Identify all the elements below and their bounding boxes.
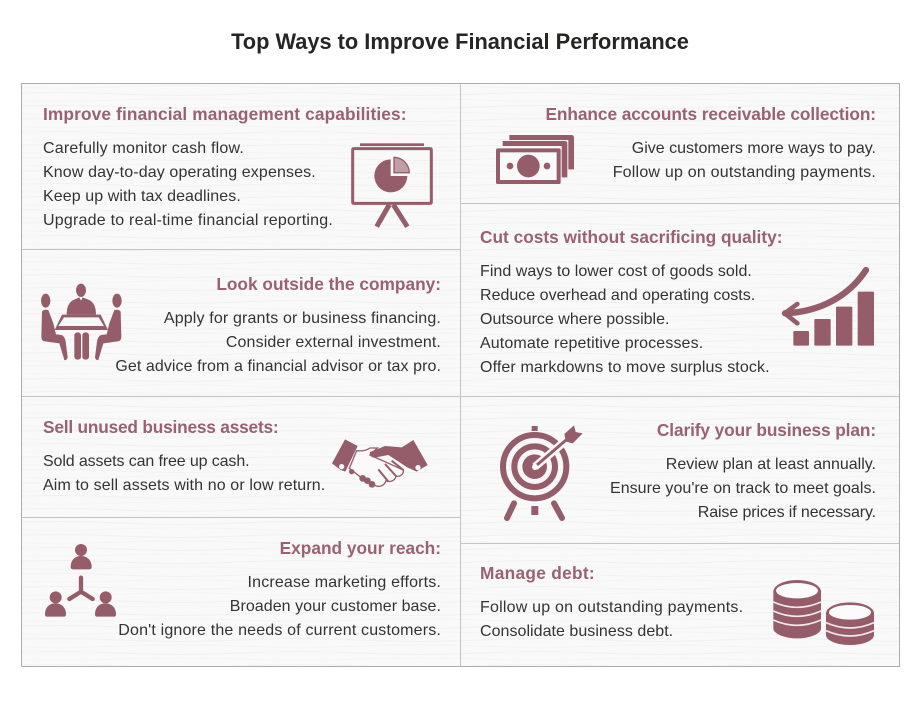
text block: Broaden your customer base.: [230, 598, 441, 615]
text block: Find ways to lower cost of goods sold.: [480, 263, 752, 280]
icon: stack of banknotes: [496, 135, 574, 184]
text block: [118, 574, 441, 639]
text block: Offer markdowns to move surplus stock.: [480, 359, 770, 376]
icon: presentation board with pie chart: [351, 143, 433, 228]
heading: Look outside the company:: [216, 274, 441, 294]
text block: Know day-to-day operating expenses.: [43, 164, 316, 181]
icon: bar chart with curved arrow: [782, 266, 874, 346]
text block: [115, 310, 441, 375]
text block: [43, 140, 333, 229]
text block: [610, 456, 876, 521]
text block: Review plan at least annually.: [666, 456, 876, 473]
text block: Follow up on outstanding payments.: [480, 599, 743, 616]
text block: Aim to sell assets with no or low return.: [43, 477, 325, 494]
text block: Automate repetitive processes.: [480, 335, 703, 352]
icon: target with arrow: [500, 426, 583, 521]
heading: Clarify your business plan:: [657, 420, 876, 440]
text block: Upgrade to real-time financial reporting.: [43, 212, 333, 229]
text block: Get advice from a financial advisor or tax pro.: [115, 358, 441, 375]
text block: Carefully monitor cash flow.: [43, 140, 244, 157]
text block: Increase marketing efforts.: [248, 574, 441, 591]
heading: Sell unused business assets:: [43, 417, 278, 437]
icon: handshake: [332, 439, 428, 488]
text block: Outsource where possible.: [480, 311, 669, 328]
text block: Don't ignore the needs of current customers.: [118, 622, 441, 639]
title: Top Ways to Improve Financial Performance: [231, 29, 689, 54]
text block: Sold assets can free up cash.: [43, 453, 249, 470]
text block: Ensure you're on track to meet goals.: [610, 480, 876, 497]
text block: [480, 263, 770, 376]
text block: [480, 599, 743, 640]
heading: Cut costs without sacrificing quality:: [480, 227, 782, 247]
text block: Follow up on outstanding payments.: [613, 164, 876, 181]
heading: Expand your reach:: [280, 538, 441, 558]
icon: connected people network: [45, 544, 116, 617]
text block: [613, 140, 876, 181]
text block: [43, 453, 325, 494]
text block: Reduce overhead and operating costs.: [480, 287, 755, 304]
text block: Raise prices if necessary.: [698, 504, 876, 521]
text block: Consider external investment.: [226, 334, 441, 351]
heading: Improve financial management capabilities:: [43, 104, 407, 124]
text block: Keep up with tax deadlines.: [43, 188, 241, 205]
heading: Enhance accounts receivable collection:: [545, 104, 876, 124]
icon: stacks of coins: [773, 580, 874, 645]
text block: Give customers more ways to pay.: [632, 140, 876, 157]
text block: Apply for grants or business financing.: [164, 310, 441, 327]
heading: Manage debt:: [480, 563, 595, 583]
icon: people meeting at a table: [41, 284, 122, 360]
text block: Consolidate business debt.: [480, 623, 673, 640]
